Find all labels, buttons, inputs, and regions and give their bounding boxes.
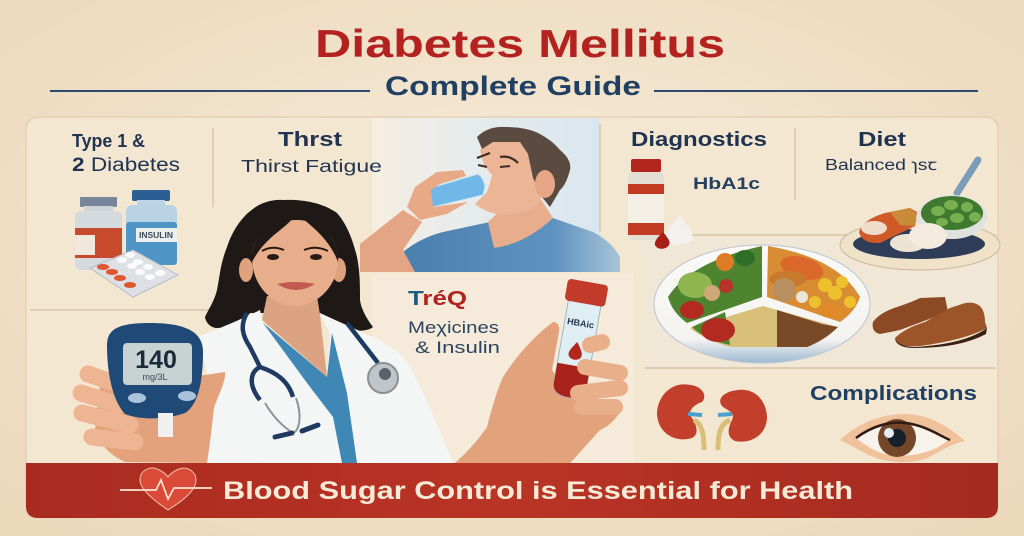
- icon: kidneys: [657, 384, 767, 450]
- label: treatment: [408, 288, 500, 357]
- heading: diet: [825, 129, 937, 174]
- icon: diagnostic bottle: [628, 159, 693, 249]
- banner: [26, 463, 998, 518]
- icon: eye: [840, 414, 965, 462]
- label: HbA1c: HbA1c: [693, 174, 760, 193]
- panel: treatment background: [372, 273, 634, 463]
- main panel: [26, 117, 998, 517]
- icon: heart with pulse: [120, 468, 212, 510]
- illustration: hand with blood tube: HBAic: [566, 316, 595, 330]
- heading: types: [72, 130, 180, 176]
- label: treatment: & Insulin: [415, 338, 500, 357]
- label: treatment: Meχicines: [408, 318, 499, 337]
- illustration: hand with glucose meter: mg/3L: [142, 372, 168, 382]
- heading: diet: Balanced ɿsꞇ: [825, 157, 937, 174]
- illustration: man drinking water: [360, 127, 620, 272]
- divider lines: [30, 124, 996, 368]
- banner text: Blood Sugar Control is Essential for Health: [223, 477, 853, 505]
- icon: medicine bottles and pills: INSULIN: [139, 230, 173, 240]
- illustration: doctor: [198, 200, 453, 463]
- heading: types: Type 1 &: [72, 130, 145, 151]
- icon: medicine bottles and pills: [75, 190, 178, 297]
- panel: thirst background: [372, 118, 600, 272]
- icon: plate with pan: [840, 160, 1000, 270]
- title: Diabetes Mellitus: [315, 23, 725, 66]
- heading: thirst: [241, 129, 382, 176]
- icon: food plate: [654, 245, 870, 363]
- label: treatment: TréQ: [408, 288, 467, 310]
- heading: thirst: Thrst: [278, 129, 342, 151]
- heading: types: 2 Diabetes: [72, 155, 180, 176]
- heading: diet: Diet: [858, 129, 906, 151]
- heading: complications: Complications: [810, 383, 977, 405]
- panel: food background: [640, 236, 997, 368]
- heading: diagnostics: Diagnostics: [631, 129, 767, 151]
- illustration: hand with glucose meter: [81, 323, 225, 463]
- illustration: hand with blood tube: [455, 278, 620, 463]
- icon: shoes: [873, 297, 987, 348]
- subtitle: Complete Guide: [385, 71, 641, 101]
- heading: thirst: Thirst Fatigue: [241, 156, 382, 176]
- illustration: hand with glucose meter: 140: [135, 346, 177, 374]
